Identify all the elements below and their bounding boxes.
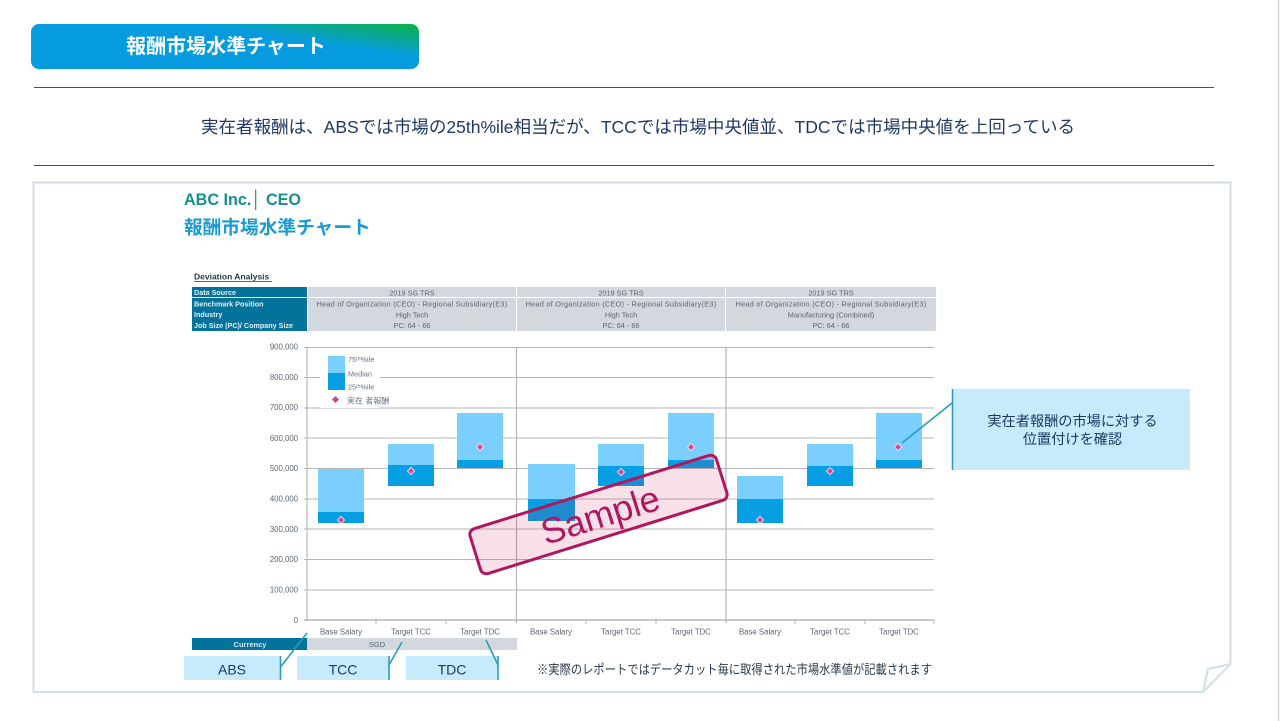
title banner bbox=[31, 24, 419, 69]
bars: panel 3 bbox=[737, 413, 922, 523]
benchmark table: 2019 SG TRS bbox=[389, 288, 435, 298]
x axis labels: Target TDC bbox=[671, 628, 711, 636]
benchmark table: Industry bbox=[194, 310, 222, 319]
callout: TCC: TCC bbox=[329, 662, 357, 678]
benchmark table: 2019 SG TRS bbox=[808, 288, 854, 298]
sample stamp: Sample bbox=[536, 477, 665, 553]
summary statement: 実在者報酬は、ABSでは市場の25th%ile相当だが、TCCでは市場中央値並、TDCでは市場中央値を上回っている bbox=[201, 117, 1075, 137]
currency row bbox=[192, 638, 517, 650]
benchmark table: High Tech bbox=[605, 310, 637, 320]
title banner: 報酬市場水準チャート bbox=[126, 35, 326, 58]
benchmark table: High Tech bbox=[396, 310, 428, 320]
callout: TDC: TDC bbox=[438, 662, 466, 678]
x axis labels: Base Salary bbox=[320, 628, 362, 636]
currency row: SGD bbox=[369, 640, 386, 649]
benchmark table: Head of Organization (CEO) - Regional Subsidiary(E3) bbox=[526, 300, 716, 308]
callout: TCC bbox=[297, 642, 402, 680]
incumbent markers bbox=[337, 443, 902, 524]
legend: 75ᵗʰ%ile bbox=[348, 355, 374, 364]
y axis labels: 200,000 bbox=[270, 555, 299, 564]
x axis labels: Target TCC bbox=[391, 628, 431, 636]
y axis labels bbox=[270, 342, 299, 625]
benchmark table bbox=[192, 287, 936, 331]
benchmark table: Head of Organization (CEO) - Regional Subsidiary(E3) bbox=[736, 300, 926, 308]
callout: ABS: ABS bbox=[218, 662, 246, 678]
sample stamp bbox=[468, 454, 729, 575]
benchmark table: Job Size (PC)/ Company Size bbox=[194, 321, 293, 330]
benchmark table: PC: 64 - 66 bbox=[603, 321, 639, 330]
y axis labels: 500,000 bbox=[270, 464, 299, 473]
x axis labels: Base Salary bbox=[530, 628, 572, 636]
x axis labels: Target TCC bbox=[810, 628, 850, 636]
legend: Median bbox=[348, 370, 372, 378]
deviation analysis label: Deviation Analysis bbox=[194, 272, 270, 282]
bars: panel 1 bbox=[318, 413, 503, 523]
benchmark table: 2019 SG TRS bbox=[598, 288, 644, 298]
report heading bbox=[184, 189, 371, 238]
legend bbox=[320, 352, 389, 408]
y axis labels: 800,000 bbox=[270, 373, 299, 382]
benchmark table: PC: 64 - 66 bbox=[394, 321, 430, 330]
x axis labels: Target TDC bbox=[460, 628, 500, 636]
y axis labels: 700,000 bbox=[270, 403, 299, 412]
benchmark table: PC: 64 - 66 bbox=[813, 321, 849, 330]
legend: 実在 者報酬 bbox=[347, 396, 389, 406]
callout: position check: 実在者報酬の市場に対する bbox=[987, 413, 1158, 430]
currency row: Currency bbox=[234, 640, 267, 649]
report heading: 報酬市場水準チャート bbox=[184, 217, 371, 238]
footnote: ※実際のレポートではデータカット毎に取得された市場水準値が記載されます bbox=[537, 662, 932, 677]
y axis labels: 600,000 bbox=[270, 434, 299, 443]
callout: position check bbox=[902, 389, 1190, 470]
benchmark table: Data Source bbox=[194, 288, 236, 297]
report heading: ABC Inc.│ CEO bbox=[184, 189, 301, 211]
benchmark table: Head of Organization (CEO) - Regional Subsidiary(E3) bbox=[317, 300, 507, 308]
x axis labels: Target TCC bbox=[601, 628, 641, 636]
x axis labels bbox=[320, 628, 919, 636]
y axis labels: 400,000 bbox=[270, 494, 299, 504]
benchmark table: Benchmark Position bbox=[194, 300, 264, 308]
x axis labels: Base Salary bbox=[739, 628, 781, 636]
y axis labels: 300,000 bbox=[270, 525, 299, 534]
y axis labels: 0 bbox=[294, 616, 299, 625]
legend: 25ᵗʰ%ile bbox=[348, 382, 374, 392]
y axis labels: 900,000 bbox=[270, 342, 299, 352]
benchmark table: Manufacturing (Combined) bbox=[788, 310, 874, 320]
bars: panel 2 bbox=[528, 413, 714, 521]
bar chart bbox=[270, 342, 934, 636]
panel: report page frame with curled corner bbox=[34, 182, 1230, 692]
callout: TDC bbox=[406, 640, 498, 680]
y axis labels: 100,000 bbox=[270, 586, 299, 594]
x axis labels: Target TDC bbox=[879, 628, 919, 636]
callout: position check: 位置付けを確認 bbox=[1023, 432, 1122, 448]
callout: ABS bbox=[184, 633, 307, 680]
